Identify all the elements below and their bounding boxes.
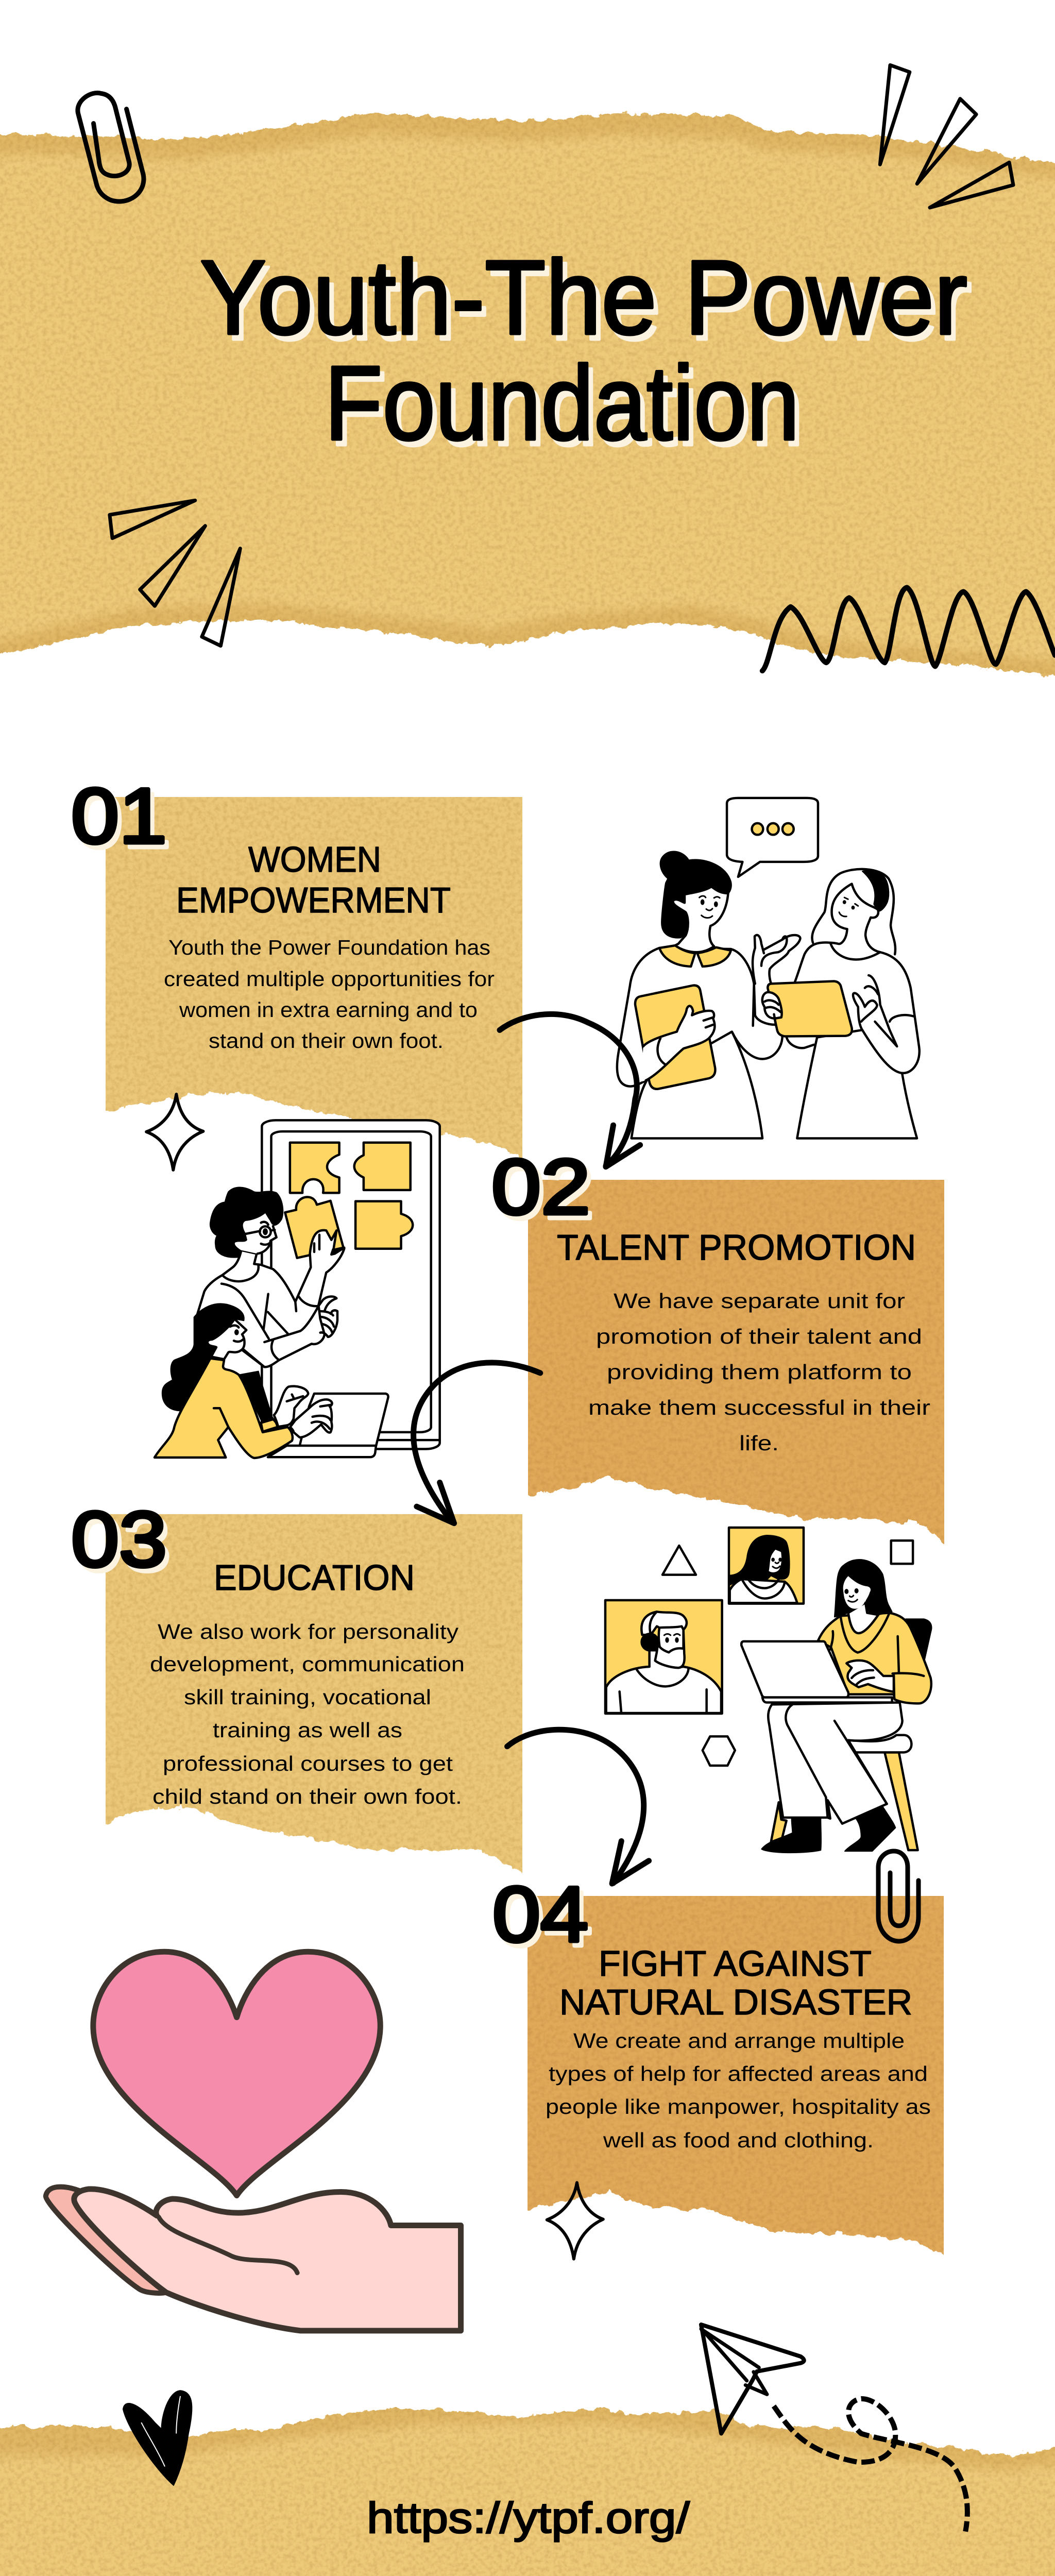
heading: women empowerment xyxy=(176,839,451,920)
title xyxy=(200,239,967,462)
shape: square xyxy=(891,1540,913,1564)
panel paper 04 xyxy=(510,1880,963,2277)
panel: 02 talent promotion xyxy=(491,1143,963,1571)
body text 01: women in extra earning and to xyxy=(179,998,478,1022)
number 02: 02 xyxy=(491,1143,590,1231)
icon: sparkle panel 01 xyxy=(146,1094,203,1170)
body text 03 xyxy=(150,1620,465,1808)
body text 01 xyxy=(164,936,495,1053)
body text 01: created multiple opportunities for xyxy=(164,967,495,991)
body text 02: make them successful in their xyxy=(588,1396,930,1419)
icon: doodle heart xyxy=(123,2391,192,2485)
right woman xyxy=(762,869,920,1138)
left woman xyxy=(617,851,801,1138)
panel: 03 education xyxy=(71,1496,541,1901)
body text 04: We create and arrange multiple xyxy=(573,2029,905,2053)
panel: header banner xyxy=(0,65,1055,677)
illustration: heart in open hand xyxy=(46,1952,461,2331)
illustration: video call with woman at laptop xyxy=(605,1528,931,1853)
heading: fight against natural disaster xyxy=(559,1943,912,2022)
body text 04: people like manpower, hospitality as xyxy=(546,2095,931,2119)
number 03: 03 xyxy=(71,1496,167,1583)
number 04: 04 xyxy=(492,1871,588,1958)
body text 03: training as well as xyxy=(213,1718,402,1742)
icon: burst lines bottom left xyxy=(110,500,240,646)
shape: triangle xyxy=(662,1546,696,1575)
dashed flight path xyxy=(774,2399,967,2532)
body text 02: providing them platform to xyxy=(607,1360,912,1384)
icon: sparkle panel 04 xyxy=(547,2183,603,2259)
panel: 04 fight against natural disaster xyxy=(492,1871,963,2277)
body text 03: We also work for personality xyxy=(158,1620,459,1643)
heading: fight against natural disaster: NATURAL DISASTER xyxy=(559,1982,912,2022)
heading: fight against natural disaster: FIGHT AGAINST xyxy=(599,1943,872,1984)
panel paper 02 xyxy=(510,1164,963,1571)
number 01: 01 xyxy=(71,772,167,860)
heading: education: EDUCATION xyxy=(214,1557,415,1598)
panel paper 01 xyxy=(106,797,522,1158)
panel paper 03 xyxy=(88,1499,541,1901)
seated woman with laptop xyxy=(155,1303,388,1458)
body text 02: We have separate unit for xyxy=(614,1289,905,1313)
torn paper background: footer xyxy=(0,2408,1055,2576)
body text 04: types of help for affected areas and xyxy=(549,2062,928,2086)
title: Youth-The Power xyxy=(200,239,967,357)
body text 04: well as food and clothing. xyxy=(603,2128,874,2152)
icon: paperclip xyxy=(78,93,144,201)
body text 01: Youth the Power Foundation has xyxy=(168,936,490,959)
arrow: panel 03 to panel 04 xyxy=(507,1730,649,1884)
body text 04 xyxy=(546,2029,931,2152)
body text 01: stand on their own foot. xyxy=(209,1029,444,1053)
phone frame xyxy=(262,1120,440,1449)
body text 03: child stand on their own foot. xyxy=(152,1785,462,1808)
illustration: two women talking xyxy=(617,798,920,1138)
body text 03: skill training, vocational xyxy=(184,1685,431,1709)
body text 03: development, communication xyxy=(150,1652,465,1676)
heading: women empowerment: EMPOWERMENT xyxy=(176,880,451,920)
shape: hexagon xyxy=(703,1736,735,1766)
speech bubble xyxy=(727,798,818,877)
arrow: panel 02 to panel 03 xyxy=(414,1363,540,1523)
footer url: https://ytpf.org/ xyxy=(367,2494,690,2542)
icon: zigzag scribble xyxy=(762,587,1055,671)
panel: footer banner xyxy=(0,2325,1055,2576)
portrait: man with headset xyxy=(605,1600,722,1714)
portrait: woman xyxy=(729,1528,804,1604)
icon: burst lines top right xyxy=(880,65,1013,208)
body text 02: life. xyxy=(739,1431,779,1455)
body text 02 xyxy=(588,1289,930,1455)
man with glasses xyxy=(197,1188,344,1367)
body text 03: professional courses to get xyxy=(163,1752,453,1775)
illustration: team solving puzzle on phone xyxy=(155,1120,440,1458)
arrow: panel 01 to panel 02 xyxy=(500,1014,640,1167)
icon: paperclip panel 04 xyxy=(878,1851,918,1941)
heading: women empowerment: WOMEN xyxy=(248,839,381,879)
puzzle pieces xyxy=(290,1143,413,1249)
panel: 01 women empowerment xyxy=(71,772,541,1185)
hand xyxy=(46,2187,461,2331)
icon: paper plane xyxy=(701,2325,804,2433)
torn paper background: header xyxy=(0,113,1055,677)
body text 02: promotion of their talent and xyxy=(596,1325,922,1348)
heading: talent promotion: TALENT PROMOTION xyxy=(557,1227,916,1267)
woman on chair with laptop xyxy=(741,1560,931,1853)
title: Foundation xyxy=(325,344,799,462)
heart xyxy=(93,1952,380,2195)
